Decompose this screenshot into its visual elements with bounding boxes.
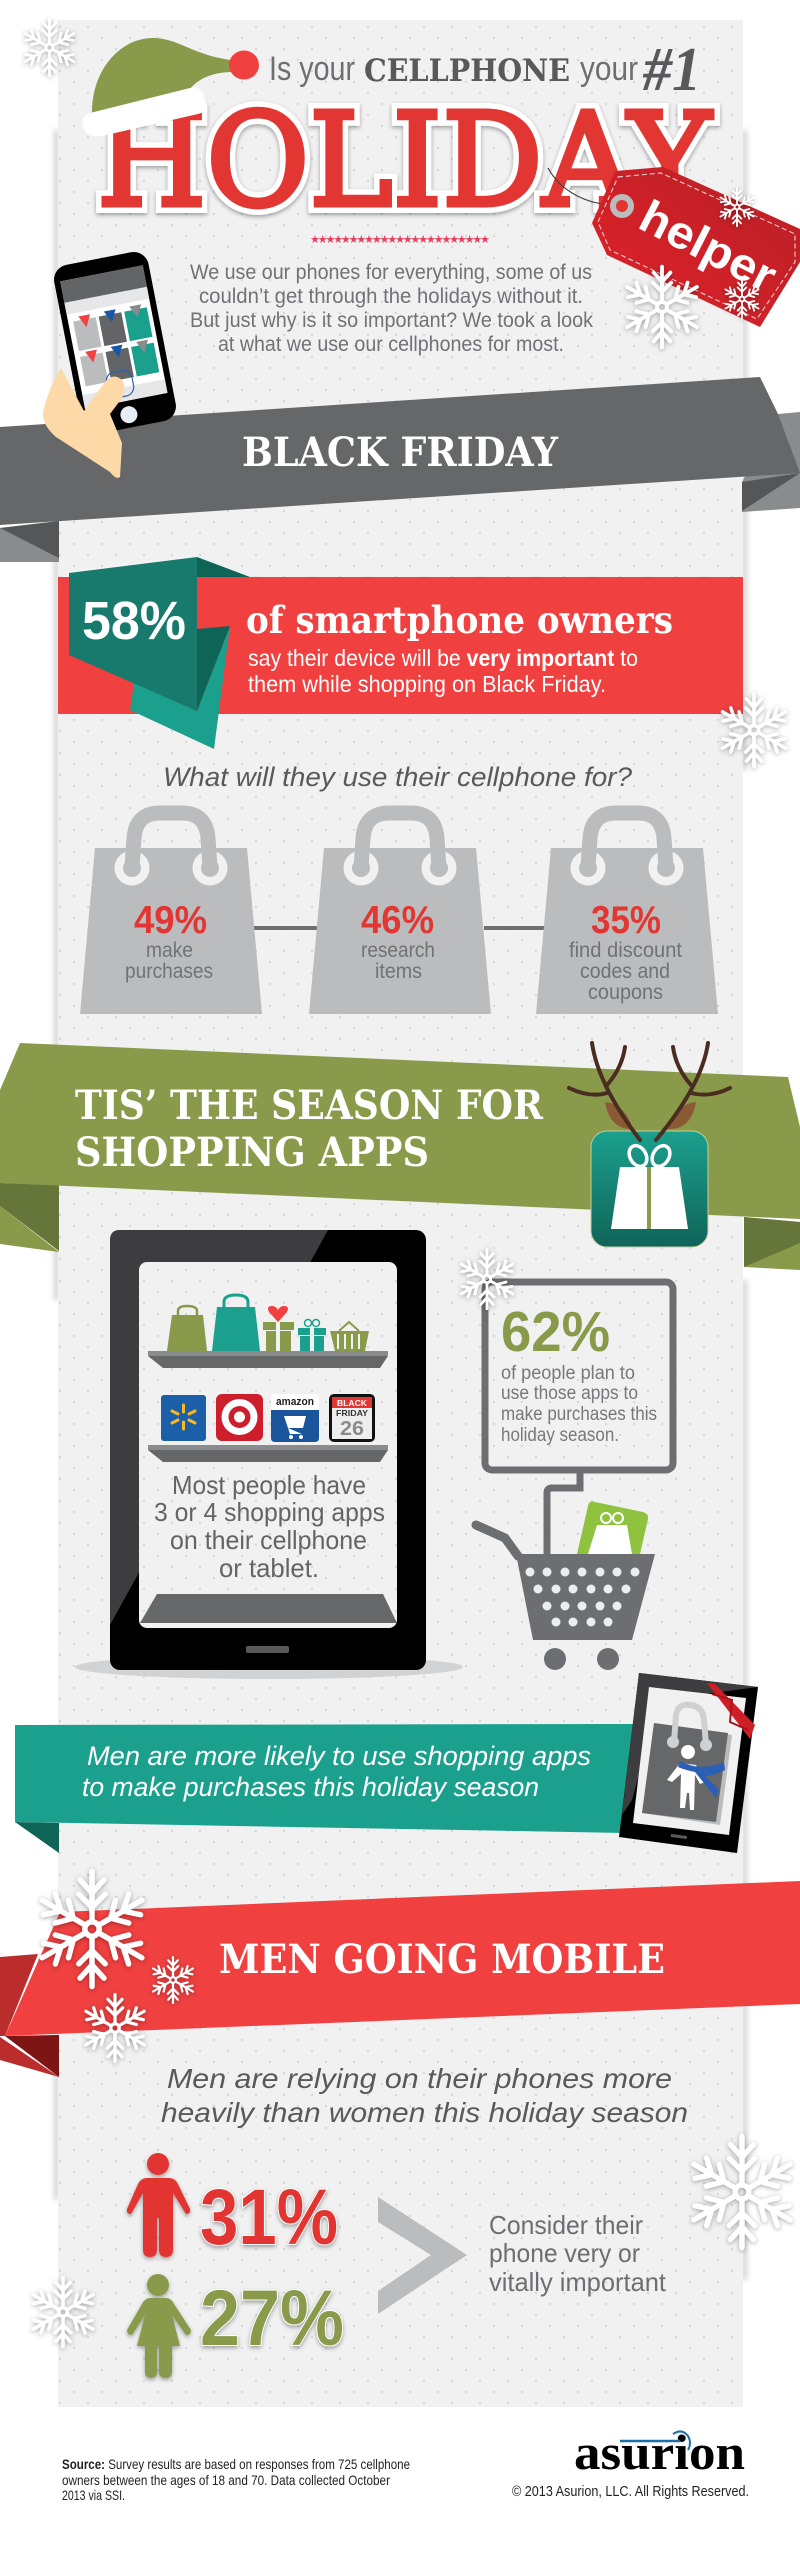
text: consider their phone: Consider their bbox=[489, 2210, 643, 2240]
title line: CELLPHONE bbox=[364, 53, 570, 89]
heading: men relying on phones: Men are relying on their phones more bbox=[167, 2063, 672, 2094]
icon: phone in hand bbox=[43, 249, 179, 478]
intro text: But just why is it so important? We took a look bbox=[190, 309, 593, 332]
text: most people: 3 or 4 shopping apps bbox=[154, 1497, 385, 1527]
cart sign bbox=[485, 1282, 673, 1556]
text: device importance: say their device will be very important to bbox=[248, 645, 638, 671]
stat: 27%: 27% bbox=[200, 2273, 344, 2362]
icon: reindeer gift app bbox=[569, 1043, 730, 1247]
bag: 46% research items: research bbox=[361, 939, 435, 962]
title line: your bbox=[580, 50, 638, 88]
heading: tis the season: TIS’ THE SEASON FOR bbox=[75, 1082, 544, 1129]
app icon: black friday calendar: BLACK bbox=[337, 1398, 368, 1408]
heading: men relying on phones bbox=[161, 2063, 688, 2128]
bag: 49% make purchases bbox=[80, 813, 262, 1014]
app icon: black friday calendar: 26 bbox=[340, 1418, 364, 1440]
heading: black friday: BLACK FRIDAY bbox=[242, 429, 558, 476]
heading: tis the season bbox=[75, 1082, 544, 1176]
icon: man bbox=[127, 2153, 190, 2257]
greater-than sign bbox=[378, 2197, 467, 2314]
bag: 49% make purchases: make bbox=[146, 939, 193, 962]
heading: of smartphone owners: of smartphone owners bbox=[246, 598, 673, 642]
bag: 35% find discount codes and coupons: 35% bbox=[591, 899, 661, 942]
app icon: target bbox=[216, 1394, 263, 1441]
text: plan to use: use those apps to bbox=[501, 1383, 638, 1404]
text: most people: or tablet. bbox=[219, 1553, 319, 1583]
text: men more likely: to make purchases this holiday season bbox=[82, 1772, 539, 1802]
text: most people bbox=[154, 1470, 385, 1583]
source note: Source: Survey results are based on responses from 725 cellphone bbox=[62, 2456, 410, 2472]
bag: 46% research items bbox=[309, 813, 491, 1014]
divider stars: ★★★★★★★★★★★★★★★★★★★★★★★ bbox=[310, 233, 490, 246]
intro text bbox=[190, 261, 593, 356]
snowflake right of band bbox=[718, 694, 790, 766]
bag: 49% make purchases: 49% bbox=[134, 899, 207, 942]
bag: 49% make purchases: purchases bbox=[125, 960, 213, 983]
tablet bottom shelf bbox=[140, 1594, 397, 1623]
bag: 46% research items: items bbox=[375, 960, 422, 983]
app icon: amazon: amazon bbox=[276, 1396, 314, 1408]
shelf icons bbox=[167, 1295, 369, 1351]
text: device importance: them while shopping on Black Friday. bbox=[248, 671, 606, 697]
icon: gift tablet bbox=[619, 1673, 758, 1853]
title: HOLIDAY: HOLIDAY bbox=[97, 86, 713, 236]
heading: tis the season: SHOPPING APPS bbox=[75, 1129, 429, 1176]
source note: 2013 via SSI. bbox=[62, 2487, 125, 2503]
title line: #1 bbox=[642, 36, 701, 104]
snowflake on sign bbox=[458, 1249, 516, 1309]
icon: shopping cart bbox=[476, 1502, 655, 1670]
intro text: at what we use our cellphones for most. bbox=[218, 333, 564, 356]
app icon: black friday calendar: FRIDAY bbox=[336, 1408, 368, 1418]
app icon: walmart bbox=[161, 1395, 206, 1441]
ribbon: teal bbox=[69, 557, 250, 749]
text: consider their phone: phone very or bbox=[489, 2238, 640, 2268]
bag: 35% find discount codes and coupons: find discount bbox=[569, 939, 682, 962]
icon: santa hat bbox=[82, 38, 259, 136]
banner: men going mobile bbox=[0, 1881, 800, 2077]
text: most people: Most people have bbox=[172, 1470, 366, 1500]
stat: 58%: 58% bbox=[82, 591, 186, 651]
source note bbox=[62, 2456, 410, 2503]
text: plan to use: holiday season. bbox=[501, 1425, 619, 1446]
stat: 62%: 62% bbox=[501, 1300, 610, 1364]
copyright: © 2013 Asurion, LLC. All Rights Reserved. bbox=[512, 2483, 749, 2500]
bag: 35% find discount codes and coupons: codes and bbox=[580, 960, 670, 983]
text: device importance bbox=[248, 645, 638, 697]
snowflake top left bbox=[22, 19, 77, 76]
panel: 58% red band bbox=[58, 557, 743, 749]
snowflakes bottom bbox=[29, 2136, 797, 2347]
text: plan to use: of people plan to bbox=[501, 1363, 635, 1384]
logo: asurion: asurion bbox=[574, 2424, 745, 2480]
intro text: couldn’t get through the holidays without it. bbox=[199, 285, 583, 308]
text: men more likely bbox=[82, 1741, 591, 1802]
heading: men relying on phones: heavily than women this holiday season bbox=[161, 2097, 688, 2128]
title: HOLIDAY: HOLIDAY bbox=[97, 86, 713, 236]
source note: owners between the ages of 18 and 70. Data collected October bbox=[62, 2472, 390, 2488]
intro text: We use our phones for everything, some of us bbox=[190, 261, 592, 284]
text: most people: on their cellphone bbox=[170, 1525, 367, 1555]
text: men more likely: Men are more likely to use shopping apps bbox=[87, 1741, 591, 1771]
text: consider their phone bbox=[489, 2210, 667, 2297]
banner: shopping apps bbox=[0, 1043, 800, 1270]
snowflakes on tag bbox=[622, 188, 761, 347]
connector lines bbox=[254, 926, 544, 930]
banner: black friday bbox=[0, 377, 800, 562]
text: consider their phone: vitally important bbox=[489, 2267, 667, 2297]
stat: 31%: 31% bbox=[200, 2172, 338, 2261]
tag: helper bbox=[548, 167, 800, 347]
shirts bbox=[72, 303, 159, 386]
app icon: amazon bbox=[271, 1394, 319, 1442]
shelf one bbox=[148, 1351, 388, 1368]
shelf two bbox=[148, 1445, 388, 1462]
app icon: black friday calendar bbox=[329, 1394, 375, 1442]
text: plan to use bbox=[501, 1363, 657, 1446]
bag: 35% find discount codes and coupons: coupons bbox=[588, 981, 663, 1004]
tag: helper: helper bbox=[631, 190, 785, 302]
text: plan to use: make purchases this bbox=[501, 1404, 657, 1425]
person with scarf bbox=[667, 1745, 725, 1810]
tablet shadow bbox=[75, 1655, 463, 1679]
bag: 46% research items: 46% bbox=[361, 899, 434, 942]
heading: men going mobile: MEN GOING MOBILE bbox=[219, 1936, 665, 1983]
snowflakes on red banner bbox=[36, 1871, 196, 2062]
title line bbox=[269, 36, 701, 104]
title line: Is your bbox=[269, 50, 355, 88]
icon: woman bbox=[127, 2274, 191, 2378]
banner: men apps teal bbox=[15, 1724, 640, 1853]
tablet bbox=[110, 1230, 426, 1670]
bag: 35% find discount codes and coupons bbox=[536, 813, 718, 1014]
question heading: What will they use their cellphone for? bbox=[163, 762, 632, 792]
